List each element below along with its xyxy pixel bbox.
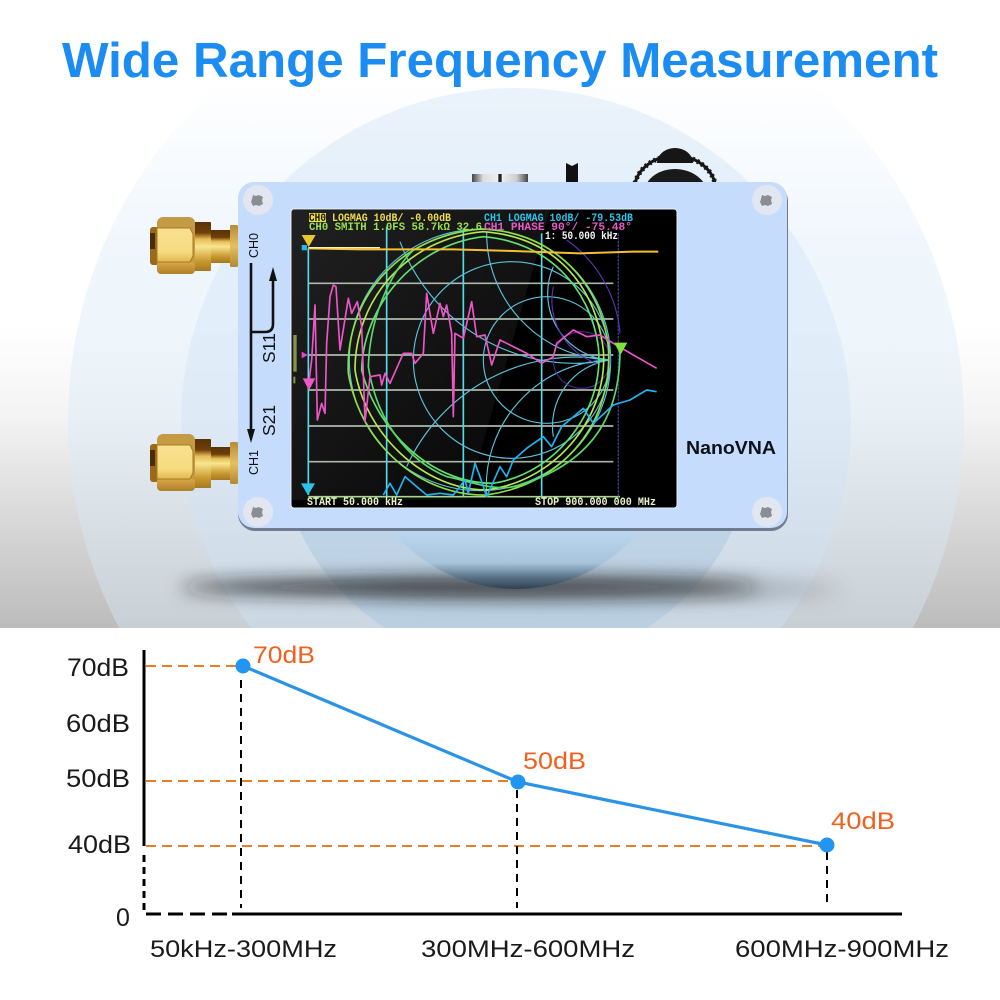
screw top left	[243, 185, 273, 215]
device body	[238, 182, 788, 531]
value labels: 50dB	[523, 748, 586, 775]
grid	[308, 283, 620, 497]
x axis labels	[150, 936, 949, 963]
screen readouts: LOGMAG 10dB/ -0.00dB	[332, 213, 451, 225]
label S21: S21	[259, 405, 279, 436]
green traces	[348, 229, 620, 495]
data line	[243, 666, 827, 845]
title: Wide Range Frequency Measurement	[62, 34, 938, 88]
top controls of device	[472, 148, 715, 183]
screw bottom left	[243, 497, 273, 527]
x axis labels: 50kHz-300MHz	[150, 936, 337, 963]
screen	[291, 209, 677, 509]
drop lines	[241, 680, 827, 908]
y axis labels: 50dB	[66, 765, 130, 793]
label S11: S11	[259, 333, 279, 363]
value labels	[253, 642, 895, 835]
x axis	[146, 912, 902, 916]
y axis labels: 70dB	[67, 654, 129, 682]
frequency chart	[66, 642, 949, 963]
screen readouts: CH1 LOGMAG 10dB/ -79.53dB	[484, 213, 633, 225]
screw bottom right	[752, 497, 782, 527]
value labels: 40dB	[831, 808, 895, 835]
value labels: 70dB	[253, 642, 315, 669]
connector CH1	[150, 434, 238, 491]
glare	[292, 210, 550, 500]
y axis labels: 60dB	[66, 710, 130, 738]
markers	[293, 235, 627, 495]
x axis labels: 300MHz-600MHz	[421, 936, 635, 963]
signal arrows	[247, 263, 277, 443]
yellow trace	[308, 248, 658, 253]
blue trace	[383, 390, 657, 497]
data points	[236, 658, 834, 852]
label CH0: CH0	[247, 233, 261, 258]
screen readouts: CH0 SMITH 1.0FS 58.7kΩ 32.6	[309, 222, 482, 234]
photo backdrop with concentric circles	[0, 88, 1000, 628]
magenta trace	[308, 285, 657, 422]
y axis	[142, 650, 146, 914]
screen readouts: STOP 900.000 000 MHz	[535, 497, 656, 509]
connector CH0	[150, 217, 238, 274]
y axis labels: 40dB	[68, 831, 131, 859]
smith chart	[349, 229, 611, 497]
label CH1: CH1	[247, 450, 261, 475]
x axis labels: 600MHz-900MHz	[735, 936, 949, 963]
screen readouts	[307, 213, 656, 509]
screen readouts: CH0	[309, 213, 326, 225]
orange guide lines	[146, 666, 827, 846]
y axis labels: 0	[116, 904, 130, 932]
screen readouts: 1: 50.000 kHz	[545, 231, 618, 243]
screen readouts: CH1 PHASE 90°/ -75.48°	[484, 222, 632, 234]
screen readouts: START 50.000 kHz	[307, 497, 403, 509]
y axis labels	[66, 654, 131, 932]
brand label: NanoVNA	[686, 438, 776, 458]
screw top right	[752, 185, 782, 215]
